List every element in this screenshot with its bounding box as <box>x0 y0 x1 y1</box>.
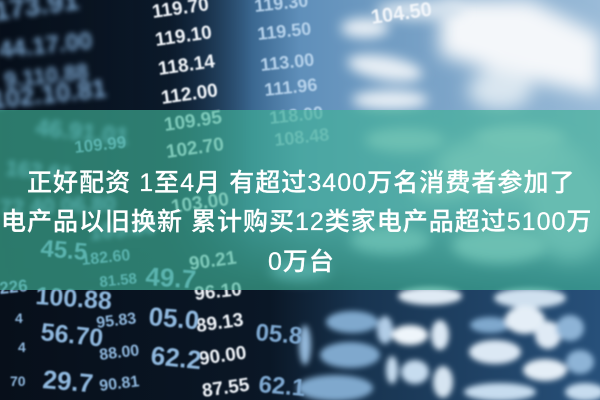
blue numbers, lower left: 81.58 <box>99 270 138 291</box>
blue numbers, lower left: 56.70 <box>39 318 105 353</box>
sharp white numbers, centre column: 119.10 <box>154 22 213 51</box>
title line 3: 0万台 <box>268 248 335 276</box>
blurred numbers, upper left: 44.17.00 <box>0 27 94 64</box>
blue numbers, lower left <box>0 133 306 400</box>
blue numbers, lower left: 182.60 <box>81 247 131 269</box>
blurred mid-tone ticker blobs <box>270 0 565 280</box>
blue numbers, lower left: 70 <box>10 373 26 389</box>
sharp white numbers, centre column: 118.14 <box>157 51 217 80</box>
sharp white numbers, centre column: 90.21 <box>188 247 238 275</box>
blurred light blobs, upper right <box>435 0 600 260</box>
sharp white numbers, centre column: 96.10 <box>193 279 243 305</box>
blue numbers, lower left: 4 <box>15 310 23 326</box>
blue numbers, lower left: 90.81 <box>98 373 140 395</box>
blurred numbers, upper left: 72 40 06.80 <box>0 191 116 220</box>
blue numbers, lower left: 95.83 <box>95 310 137 332</box>
translucent green band <box>0 110 600 290</box>
blurred numbers, lower right <box>297 287 600 400</box>
sharp white numbers, centre column: 89.13 <box>195 310 245 337</box>
blue numbers, lower left: 05.8 <box>254 319 303 350</box>
sharp white numbers, centre column: 109.95 <box>163 107 224 136</box>
blue numbers, lower left: 109.99 <box>73 133 127 157</box>
blue numbers, lower left: 29.7 <box>41 364 95 398</box>
blurred numbers, upper left: 103.80 <box>88 213 157 245</box>
blue numbers, lower left: 4 <box>18 339 26 355</box>
blue numbers, lower left: 05.0 <box>147 301 201 335</box>
soft blue numbers, right column: 118.00 <box>268 102 324 128</box>
blue numbers, lower left: 100.88 <box>35 282 113 315</box>
soft blue numbers, right column: 119.50 <box>256 18 312 44</box>
blurred numbers, upper left: 9.110.88 <box>3 59 89 92</box>
blue numbers, lower left: 49.7 <box>145 261 197 295</box>
blurred numbers, upper left <box>0 0 157 245</box>
blue numbers, lower left: 62.2 <box>149 340 203 375</box>
sharp white numbers, centre column: 90.00 <box>198 343 248 370</box>
soft blue numbers, right column <box>253 0 330 150</box>
sharp white numbers, centre column: 102.70 <box>165 134 225 163</box>
soft blue numbers, right column: 108.48 <box>273 124 330 150</box>
sharp white numbers, centre column: 103.00 <box>170 189 230 218</box>
blue numbers, lower left: 88.00 <box>98 342 140 364</box>
blue numbers, lower left: 45.5 <box>39 235 88 266</box>
soft blue numbers, right column: 111.96 <box>263 75 318 100</box>
soft blue numbers, right column: 113.00 <box>259 49 315 75</box>
sharp white numbers, centre column <box>151 0 433 400</box>
title line 1: 正好配资 1至4月 有超过3400万名消费者参加了 <box>27 169 576 197</box>
blurred numbers, upper left: 46.91.01 <box>34 114 130 151</box>
blurred numbers, upper left: 162.61 <box>4 155 74 187</box>
sharp white numbers, centre column: 112.00 <box>160 80 219 109</box>
